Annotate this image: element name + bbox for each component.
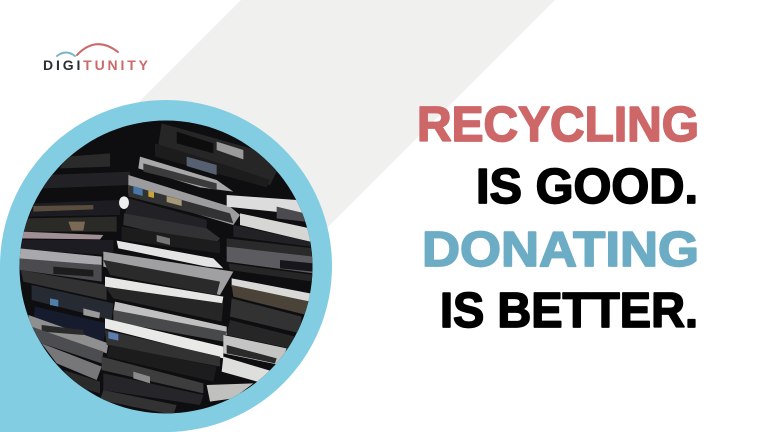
left column bbox=[60, 153, 110, 168]
logo: Digitunity bbox=[43, 44, 149, 73]
headline text bbox=[417, 98, 699, 338]
photo: stack of old laptops bbox=[15, 115, 320, 420]
logo wordmark: DIGITUNITY bbox=[43, 57, 149, 73]
white laptop corner highlight bbox=[119, 196, 129, 209]
right column bbox=[227, 195, 307, 215]
heading line: Donating: DONATING bbox=[422, 223, 699, 277]
heading line: Is good: IS GOOD. bbox=[476, 160, 698, 214]
decorative grey diagonal band bbox=[130, 0, 555, 250]
middle column bbox=[157, 123, 277, 185]
icon: logo arcs bbox=[57, 44, 118, 56]
heading line: Recycling: RECYCLING bbox=[417, 98, 699, 152]
heading line: Is better: IS BETTER. bbox=[440, 284, 698, 338]
blue circle backdrop with square lower-left corner bbox=[0, 100, 332, 432]
